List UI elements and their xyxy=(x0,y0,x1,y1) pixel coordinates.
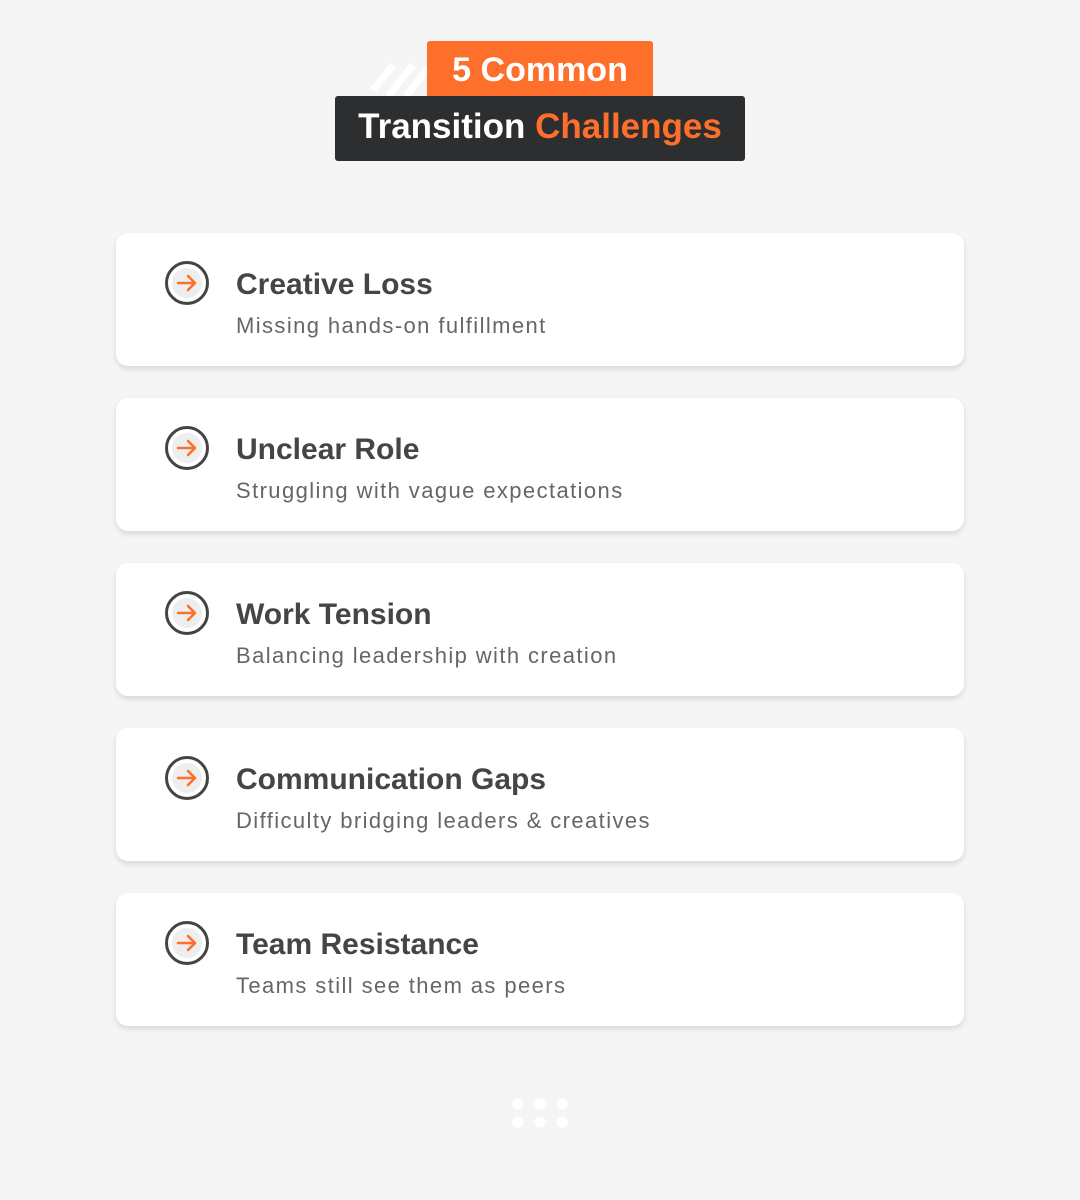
icon: arrow circle xyxy=(165,921,209,965)
icon: arrow circle xyxy=(165,591,209,635)
card 3: Work Tension xyxy=(116,563,964,696)
heading: Creative Loss xyxy=(236,268,433,301)
text: Missing hands-on fulfillment xyxy=(236,313,547,338)
decorative stripes xyxy=(370,63,427,96)
heading: Unclear Role xyxy=(236,433,419,466)
title top: 5 Common xyxy=(427,41,653,97)
icon: arrow circle xyxy=(165,756,209,800)
card 4: Communication Gaps xyxy=(116,728,964,861)
card 5: Team Resistance xyxy=(116,893,964,1026)
text: Struggling with vague expectations xyxy=(236,478,624,503)
text: Balancing leadership with creation xyxy=(236,643,617,668)
title bottom: Transition Challenges: Transition Challenges xyxy=(358,107,722,146)
card 1: Creative Loss xyxy=(116,233,964,366)
title xyxy=(335,41,745,161)
card 2: Unclear Role xyxy=(116,398,964,531)
title top: 5 Common: 5 Common xyxy=(452,51,628,89)
heading: Communication Gaps xyxy=(236,763,546,796)
icon: arrow circle xyxy=(165,261,209,305)
heading: Work Tension xyxy=(236,598,432,631)
icon: arrow circle xyxy=(165,426,209,470)
text: Difficulty bridging leaders & creatives xyxy=(236,808,651,833)
decorative dots xyxy=(512,1098,568,1128)
title bottom: Transition Challenges xyxy=(335,96,745,161)
text: Teams still see them as peers xyxy=(236,973,566,998)
heading: Team Resistance xyxy=(236,928,479,961)
